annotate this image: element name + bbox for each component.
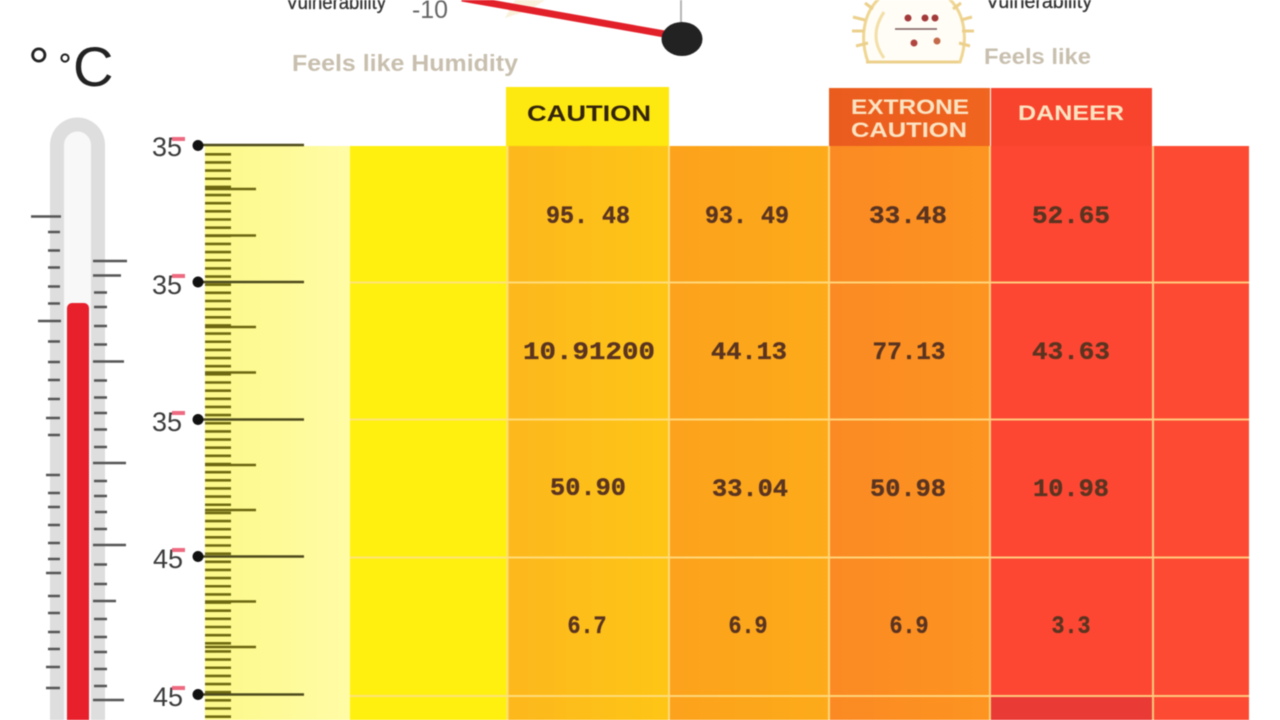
row 3 values (550, 474, 1109, 504)
ruler dots (193, 140, 204, 700)
thermometer bore (64, 132, 91, 720)
ruler (193, 140, 304, 720)
row 3 values: 50.90 (550, 474, 626, 503)
ruler minor ticks (205, 153, 231, 720)
axis label accents (172, 137, 185, 690)
header: danger: DANEER (1018, 102, 1124, 125)
row 1 values (546, 202, 1110, 231)
row 1 values: 93. 49 (705, 202, 789, 231)
header: extreme caution: EXTRONE (851, 96, 969, 119)
row 2 values: 44.13 (711, 338, 787, 367)
row 2 values (523, 338, 1110, 367)
gauge stem (680, 0, 682, 26)
row 4 values: 6.9 (728, 612, 768, 641)
row 2 values: 77.13 (872, 338, 946, 367)
icon: sun with drops (852, 0, 974, 62)
row 4 values (568, 612, 1090, 641)
ruler mid ticks (205, 189, 256, 647)
column: extreme caution (829, 146, 990, 720)
gauge needle (462, 0, 670, 35)
thermometer (31, 117, 127, 720)
label: Feels like Humidity: Feels like Humidity (292, 50, 518, 76)
column: orange (669, 146, 829, 720)
thermometer right ticks (93, 261, 127, 700)
column: yellow (350, 146, 507, 720)
row 1 values: 33.48 (869, 202, 947, 231)
axis label 35: 35 (152, 132, 182, 162)
gauge pivot (662, 22, 702, 56)
header: caution: CAUTION (527, 101, 651, 126)
ruler major ticks (198, 145, 304, 694)
axis label 45: 45 (153, 544, 183, 574)
row 3 values: 50.98 (870, 475, 946, 504)
row 1 values: 95. 48 (546, 202, 630, 231)
label: Feels like right: Feels like (984, 44, 1091, 69)
header: extreme caution: CAUTION (851, 119, 967, 142)
column: caution (507, 146, 669, 720)
row 3 values: 33.04 (712, 475, 788, 504)
heat index grid (350, 146, 1249, 720)
pale yellow column (205, 146, 350, 720)
row 4 values: 6.9 (890, 612, 928, 641)
unit heading: degrees Celsius: C (73, 35, 113, 98)
gauge decoration (505, 0, 545, 18)
axis label 35: 35 (152, 270, 182, 300)
header: caution (506, 87, 669, 146)
gauge fragment: humidity dial at top (286, 0, 702, 56)
column: extreme danger (1153, 146, 1249, 720)
header: extreme caution (829, 88, 990, 146)
axis label 45: 45 (153, 682, 183, 712)
row 1 values: 52.65 (1032, 202, 1110, 231)
header: danger (991, 88, 1152, 146)
thermometer tube (50, 117, 105, 720)
unit heading: degrees Celsius (28, 35, 113, 98)
row 4 values: 3.3 (1052, 612, 1090, 641)
thermometer left ticks (31, 216, 61, 688)
row 2 values: 10.91200 (523, 338, 655, 367)
unit heading: degrees Celsius: ° (28, 37, 50, 97)
thermometer mercury (67, 303, 89, 720)
axis label 35: 35 (152, 407, 182, 437)
column: danger (990, 146, 1153, 720)
row 4 values: 6.7 (568, 612, 606, 641)
row 2 values: 43.63 (1032, 338, 1110, 367)
row 3 values: 10.98 (1033, 475, 1109, 504)
